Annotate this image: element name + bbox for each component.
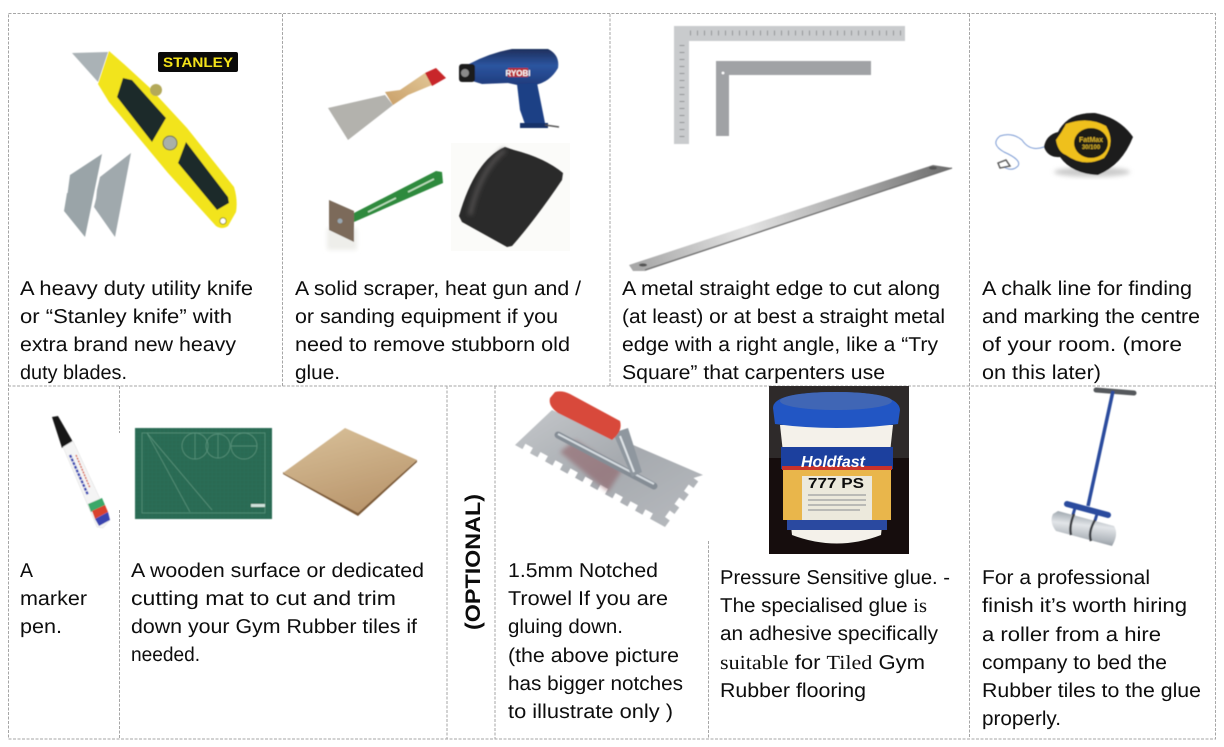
panel: pressure sensitive glue — [720, 386, 950, 702]
panel: notched trowel — [508, 391, 703, 723]
text: glue description: The specialised glue is — [720, 595, 927, 617]
text: cutting surface description: needed. — [131, 644, 200, 666]
icon: chalk line reel: FatMax — [1079, 137, 1103, 144]
text: scraper description: or sanding equipment if you — [295, 306, 558, 328]
icon: heat gun — [459, 49, 559, 128]
text: marker pen description: pen. — [20, 616, 62, 638]
icon: Stanley logo: STANLEY — [163, 54, 234, 70]
icon: Holdfast 777 PS glue bucket: 777 PS — [808, 475, 864, 492]
text: straight edge description: (at least) or at best a straight metal — [622, 306, 945, 328]
text: utility knife description — [20, 278, 253, 384]
text: scraper description: A solid scraper, heat gun and / — [295, 278, 581, 300]
text: cutting surface description — [131, 560, 424, 666]
icon: heat gun: RYOBI — [505, 69, 531, 78]
text: scraper description: need to remove stubborn old — [295, 334, 570, 356]
text: straight edge description — [622, 278, 945, 384]
panel: marker pen — [20, 416, 110, 638]
text: glue description: an adhesive specifically — [720, 623, 938, 645]
text: chalk line description: and marking the centre — [982, 306, 1200, 328]
text: trowel description: Trowel If you are — [508, 588, 668, 610]
icon: green cutting mat — [135, 428, 272, 519]
text: cutting surface description: down your Gym Rubber tiles if — [131, 616, 417, 638]
icon: metal straight edge — [629, 165, 952, 271]
text: utility knife description: or “Stanley knife” with — [20, 306, 232, 328]
text: cutting surface description: A wooden surface or dedicated — [131, 560, 424, 582]
text: marker pen description — [20, 560, 87, 638]
text: glue description: Pressure Sensitive glue. - — [720, 567, 950, 589]
text: chalk line description — [982, 278, 1200, 384]
text: chalk line description: A chalk line for finding — [982, 278, 1192, 300]
text: trowel description: gluing down. — [508, 616, 623, 638]
icon: marker pen — [52, 416, 110, 528]
icon: notched trowel — [515, 391, 703, 527]
icon: rubber sanding block — [451, 143, 570, 251]
icon: wooden board — [283, 428, 417, 516]
text: scraper description: glue. — [295, 362, 340, 384]
text: straight edge description: A metal straight edge to cut along — [622, 278, 940, 300]
icon: chalk line reel: 30/100 — [1082, 145, 1101, 151]
panel: chalk line — [982, 113, 1200, 384]
vertical label: optional: (OPTIONAL) — [462, 494, 485, 630]
text: trowel description — [508, 560, 683, 723]
text: roller description: a roller from a hire — [982, 624, 1161, 646]
icon: floor roller — [1052, 390, 1134, 546]
icon: Stanley logo — [158, 52, 238, 72]
panel: cutting surface — [131, 428, 424, 666]
icon: yellow utility knife with spare blades — [64, 51, 237, 237]
text: marker pen description: A — [20, 560, 34, 582]
text: utility knife description: duty blades. — [20, 362, 127, 384]
icon: small steel square — [716, 61, 871, 136]
text: marker pen description: marker — [20, 588, 87, 610]
text: straight edge description: Square” that carpenters use — [622, 362, 885, 384]
text: utility knife description: A heavy duty utility knife — [20, 278, 253, 300]
text: roller description — [982, 567, 1201, 730]
text: roller description: finish it’s worth hiring — [982, 595, 1187, 617]
icon: large steel square — [674, 26, 905, 144]
text: glue description — [720, 567, 950, 702]
text: chalk line description: on this later) — [982, 362, 1101, 384]
text: glue description: suitable for Tiled Gym — [720, 652, 925, 674]
panel: utility knife — [20, 51, 253, 384]
text: glue description: Rubber flooring — [720, 680, 866, 702]
panel: roller — [982, 390, 1201, 730]
icon: chalk line reel — [996, 113, 1133, 177]
text: trowel description: has bigger notches — [508, 673, 683, 695]
text: trowel description: to illustrate only ) — [508, 701, 673, 723]
text: cutting surface description: cutting mat to cut and trim — [131, 588, 396, 610]
text: roller description: properly. — [982, 708, 1061, 730]
text: chalk line description: of your room. (more — [982, 334, 1182, 356]
text: trowel description: (the above picture — [508, 645, 679, 667]
text: roller description: company to bed the — [982, 652, 1167, 674]
text: utility knife description: extra brand new heavy — [20, 334, 236, 356]
text: scraper description — [295, 278, 581, 384]
text: straight edge description: edge with a right angle, like a “Try — [622, 334, 938, 356]
text: roller description: Rubber tiles to the glue — [982, 680, 1201, 702]
icon: Holdfast 777 PS glue bucket: Holdfast — [801, 454, 866, 471]
icon: Holdfast 777 PS glue bucket — [769, 386, 909, 554]
text: trowel description: 1.5mm Notched — [508, 560, 658, 582]
icon: long-handled green scraper — [327, 171, 443, 250]
panel: metal straight edge and squares — [622, 26, 952, 384]
icon: solid scraper — [328, 68, 446, 140]
panel: scraper, heat gun and sanding equipment — [295, 49, 581, 384]
text: roller description: For a professional — [982, 567, 1150, 589]
